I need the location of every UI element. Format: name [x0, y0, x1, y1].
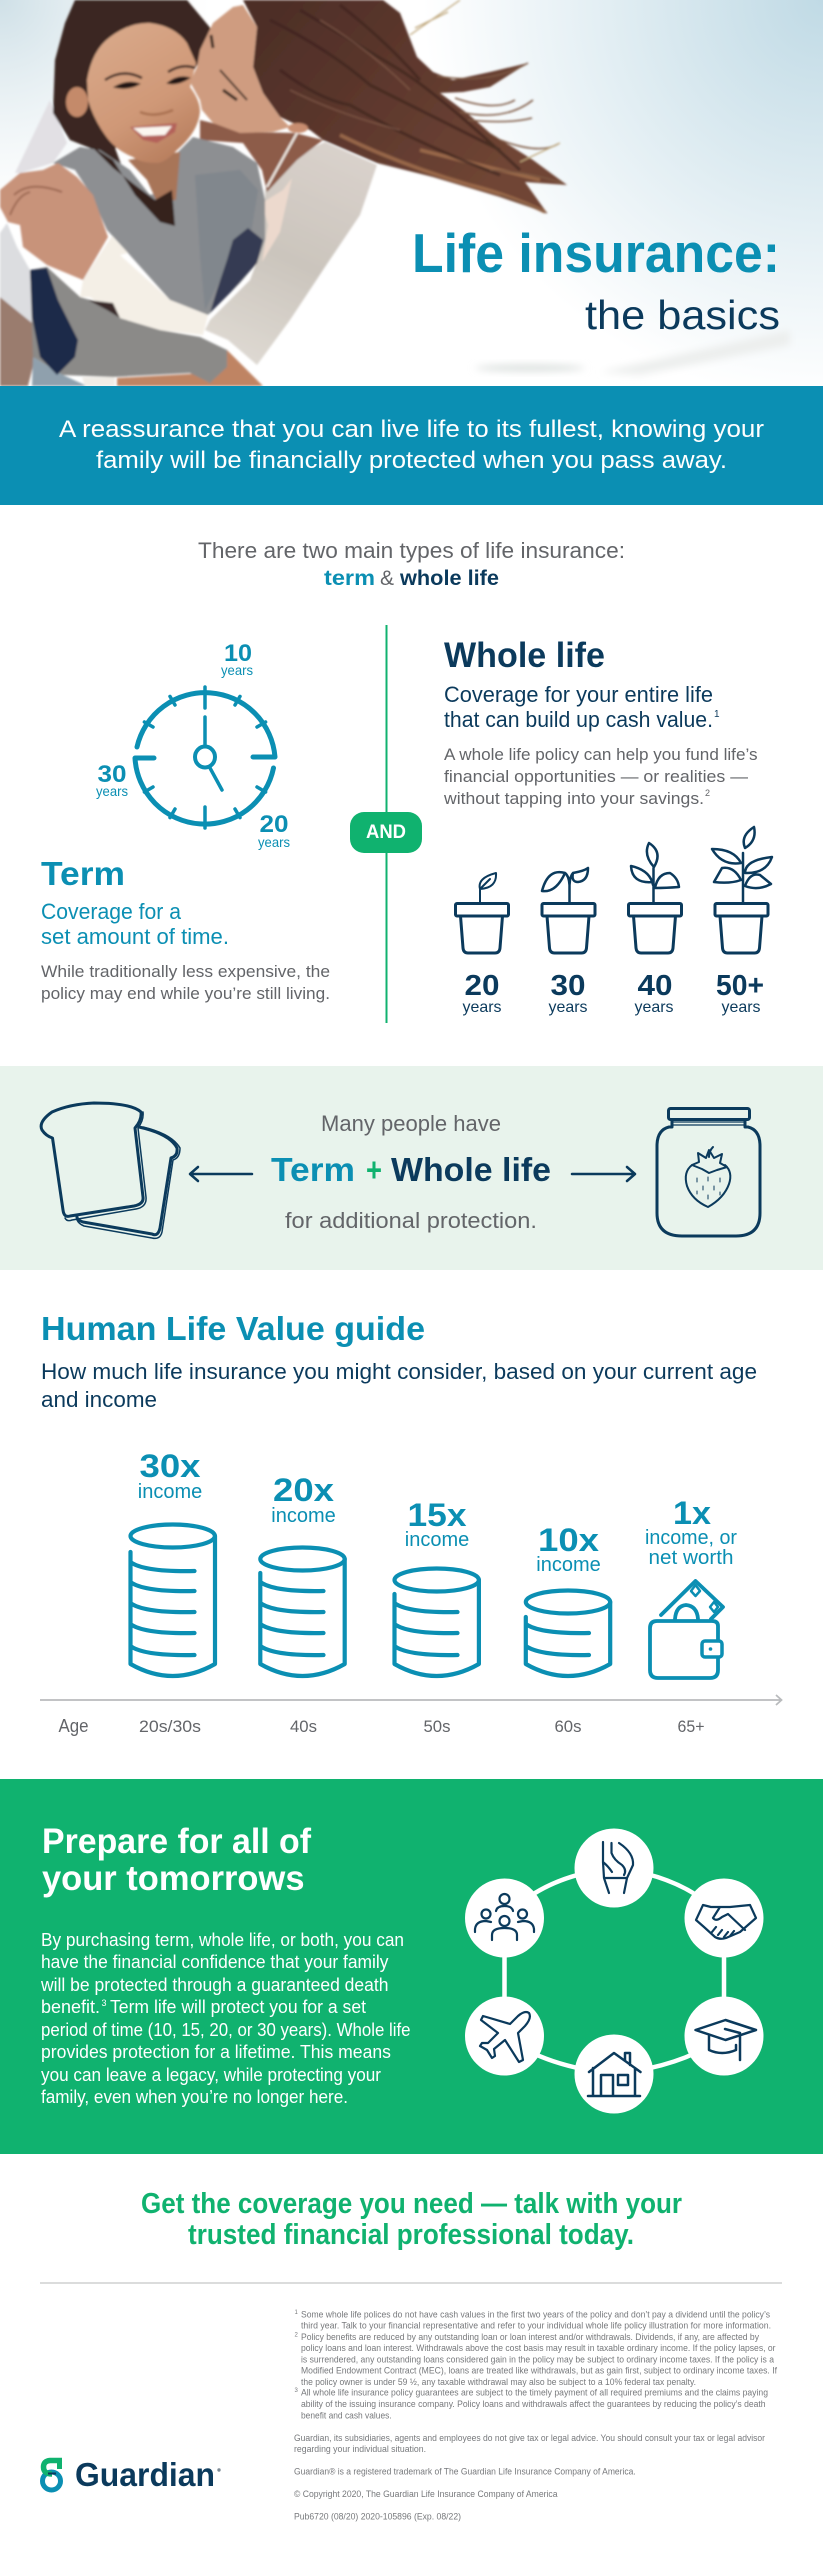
footnotes and legal text: Some whole life polices do not have cash values in the first two years of the policy and don’t pay a dividend until the policy’s: [301, 2310, 770, 2321]
text: many people have: for additional protection.: [285, 1208, 537, 1233]
call to action: trusted financial professional today.: [188, 2219, 634, 2251]
icon: handshake: [696, 1905, 756, 1939]
icon: clock with year labels: years: [221, 662, 253, 678]
chart: 15x stack: [394, 1497, 479, 1676]
footnotes and legal text: Guardian® is a registered trademark of The Guardian Life Insurance Company of America.: [294, 2466, 636, 2477]
title: [412, 222, 780, 338]
text block: Term: Term: [41, 855, 125, 892]
icon: clock with year labels: years: [258, 834, 290, 850]
chart: 30x stack: [130, 1448, 215, 1676]
icon: plant 50+ years: [712, 827, 772, 1016]
icon: family group: [475, 1894, 534, 1940]
paragraph: prepare body: [40, 1930, 410, 2107]
text: many people have: Many people have: [321, 1111, 501, 1136]
icon: plant 20 years: [456, 873, 508, 1016]
footnotes and legal text: policy loans and loan interest. Withdrawals above the cost basis may result in taxable ordinary income. If the policy lapses, or: [301, 2343, 776, 2354]
intro banner: A reassurance that you can live life to its fullest, knowing your: [59, 416, 764, 443]
footnotes and legal text: © Copyright 2020, The Guardian Life Insurance Company of America: [294, 2489, 558, 2500]
footnotes and legal text: regarding your individual situation.: [294, 2444, 426, 2455]
chart: 15x stack: income: [405, 1529, 469, 1551]
title: the basics: [585, 292, 780, 338]
chart: 15x stack: 15x: [408, 1497, 467, 1533]
icon: plant 40 years: [628, 843, 682, 1016]
icon: airplane: [480, 2012, 530, 2062]
footnotes and legal text: [294, 2310, 777, 2523]
chart: 1x wallet: 1x: [673, 1495, 711, 1531]
call to action: Get the coverage you need — talk with your: [141, 2188, 682, 2220]
diagram: circle of life events: [465, 1828, 764, 2114]
icon: clock with year labels: 30: [98, 761, 126, 788]
icon: plant 30 years: years: [548, 999, 588, 1016]
heading: Human Life Value guide: [41, 1310, 757, 1412]
paragraph: prepare body: you can leave a legacy, while protecting your: [41, 2065, 381, 2085]
text block: Term: [41, 855, 330, 1003]
heading: two main types: [198, 538, 625, 590]
chart: 30x stack: 30x: [140, 1448, 201, 1484]
paragraph: prepare body: Term life will protect you for a set: [110, 1997, 366, 2017]
heading: two main types: whole life: [399, 567, 499, 590]
icon: plant 30 years: 30: [550, 970, 586, 1002]
footnotes and legal text: Guardian, its subsidiaries, agents and employees do not give tax or legal advice. You should consult your tax or legal advisor: [294, 2433, 766, 2444]
text block: Whole life: Whole life: [444, 636, 605, 675]
chart: age axis: 40s: [290, 1717, 317, 1736]
icon: plant 30 years: [542, 868, 595, 1016]
text: many people have: Term: [271, 1151, 355, 1188]
heading: Human Life Value guide: and income: [41, 1387, 157, 1412]
footnotes and legal text: 3: [294, 2388, 298, 2394]
intro banner: [0, 386, 823, 505]
call to action: [141, 2188, 682, 2251]
text block: Term: While traditionally less expensive, the: [41, 962, 330, 981]
footnotes and legal text: third year. Talk to your financial representative and refer to your individual whole life policy illustration for more information.: [301, 2320, 771, 2331]
paragraph: prepare body: By purchasing term, whole life, or both, you can: [41, 1930, 404, 1950]
chart: 1x wallet: [645, 1495, 737, 1678]
footnotes and legal text: 2: [294, 2332, 298, 2338]
icon: clock with year labels: 20: [260, 811, 288, 838]
text block: Whole life: 1: [714, 709, 720, 720]
text: many people have: [271, 1111, 551, 1233]
paragraph: prepare body: benefit.: [41, 1997, 100, 2017]
heading: Human Life Value guide: How much life insurance you might consider, based on your current age: [41, 1359, 757, 1384]
chart: age axis: [40, 1695, 782, 1736]
chart: 20x stack: income: [271, 1505, 336, 1527]
paragraph: prepare body: 3: [102, 1998, 107, 2008]
chart: 10x stack: [526, 1522, 610, 1676]
arrow: right: [572, 1167, 635, 1181]
heading: prepare: Prepare for all of: [42, 1822, 311, 1861]
chart: 1x wallet: net worth: [648, 1547, 734, 1569]
chart: 1x wallet: income, or: [645, 1527, 737, 1549]
arrow: left: [190, 1167, 252, 1181]
divider with AND pill: AND: [366, 822, 406, 843]
paragraph: prepare body: will be protected through a guaranteed death: [40, 1975, 388, 1995]
icon: bread: [41, 1103, 180, 1238]
icon: clock with year labels: [96, 640, 290, 850]
footnotes and legal text: the policy owner is under 59 ½, any taxable withdrawal may also be subject to a 10% federal tax penalty.: [301, 2377, 696, 2388]
paragraph: prepare body: provides protection for a lifetime. This means: [41, 2042, 391, 2062]
hero photo: mother kissing daughter: [0, 0, 823, 386]
panel: prepare for all of your tomorrows: [0, 1779, 823, 2154]
heading: two main types: &: [380, 567, 394, 590]
text block: Whole life: 2: [705, 788, 710, 798]
chart: age axis: 60s: [554, 1717, 582, 1736]
icon: plant 50+ years: years: [722, 999, 760, 1016]
text: many people have: +: [366, 1151, 382, 1188]
chart: 30x stack: income: [138, 1481, 202, 1503]
footnotes and legal text: Policy benefits are reduced by any outstanding loan or loan interest and/or withdrawals. Dividends, if any, are affected by: [301, 2332, 759, 2343]
chart: age axis: 20s/30s: [139, 1717, 201, 1736]
heading: Human Life Value guide: Human Life Value guide: [41, 1310, 425, 1347]
footnotes and legal text: is surrendered, any outstanding loans considered gain in the policy may be subject to ordinary income taxes. If the policy is a: [301, 2354, 775, 2365]
text block: Term: set amount of time.: [41, 924, 229, 949]
icon: plant 20 years: 20: [464, 970, 500, 1002]
text block: Whole life: financial opportunities — or realities —: [444, 767, 748, 786]
icon: plant 20 years: years: [462, 999, 502, 1016]
text block: Term: policy may end while you’re still living.: [41, 984, 330, 1003]
icon: plant 40 years: 40: [638, 970, 672, 1002]
text block: Whole life: A whole life policy can help you fund life’s: [444, 745, 758, 764]
panel: term plus whole life: [0, 1066, 823, 1270]
text block: Whole life: [443, 636, 758, 808]
icon: plant 50+ years: 50+: [716, 970, 764, 1002]
intro banner: family will be financially protected when you pass away.: [96, 447, 727, 474]
text: many people have: Whole life: [391, 1151, 551, 1188]
chart: age axis: Age: [58, 1716, 88, 1736]
icon: caring hand: [603, 1842, 633, 1893]
paragraph: prepare body: family, even when you’re no longer here.: [41, 2087, 348, 2107]
footnotes and legal text: ability of the issuing insurance company. Policy loans and withdrawals affect the guarantees by reducing the policy’s death: [301, 2399, 766, 2410]
chart: age axis: 50s: [424, 1717, 450, 1736]
icon: house: [588, 2053, 640, 2096]
footnotes and legal text: benefit and cash values.: [301, 2410, 392, 2421]
footnotes and legal text: Modified Endowment Contract (MEC), loans are treated like withdrawals, but as gain first, subject to ordinary income taxes. If: [301, 2366, 777, 2377]
text block: Whole life: that can build up cash value.: [444, 707, 713, 732]
chart: 20x stack: 20x: [273, 1472, 334, 1508]
footnotes and legal text: Pub6720 (08/20) 2020-105896 (Exp. 08/22): [294, 2512, 461, 2523]
logo: Guardian: Guardian: [75, 2456, 215, 2493]
paragraph: prepare body: have the financial confidence that your family: [41, 1952, 388, 1972]
chart: age axis: 65+: [678, 1717, 705, 1736]
chart: 20x stack: [260, 1472, 345, 1676]
text block: Whole life: Coverage for your entire life: [444, 682, 713, 707]
icon: plant 40 years: years: [634, 999, 674, 1016]
title: Life insurance:: [412, 222, 780, 284]
heading: two main types: term: [324, 567, 375, 590]
chart: 10x stack: income: [536, 1554, 601, 1576]
icon: graduation cap: [696, 2020, 756, 2060]
icon: clock with year labels: 10: [224, 640, 252, 667]
footnotes and legal text: All whole life insurance policy guarantees are subject to the timely payment of all required premiums and the claims paying: [301, 2388, 768, 2399]
icon: strawberry jam jar: [657, 1108, 760, 1236]
divider with AND pill: [350, 625, 422, 1023]
text block: Whole life: without tapping into your savings.: [443, 789, 704, 808]
text block: Term: Coverage for a: [41, 899, 182, 924]
footnotes and legal text: 1: [294, 2310, 298, 2316]
chart: 10x stack: 10x: [538, 1522, 599, 1558]
paragraph: prepare body: period of time (10, 15, 20, or 30 years). Whole life: [41, 2020, 410, 2040]
icon: clock with year labels: years: [96, 783, 128, 799]
heading: prepare: your tomorrows: [42, 1859, 304, 1898]
heading: two main types: There are two main types of life insurance:: [198, 538, 625, 563]
heading: prepare: [42, 1822, 311, 1898]
